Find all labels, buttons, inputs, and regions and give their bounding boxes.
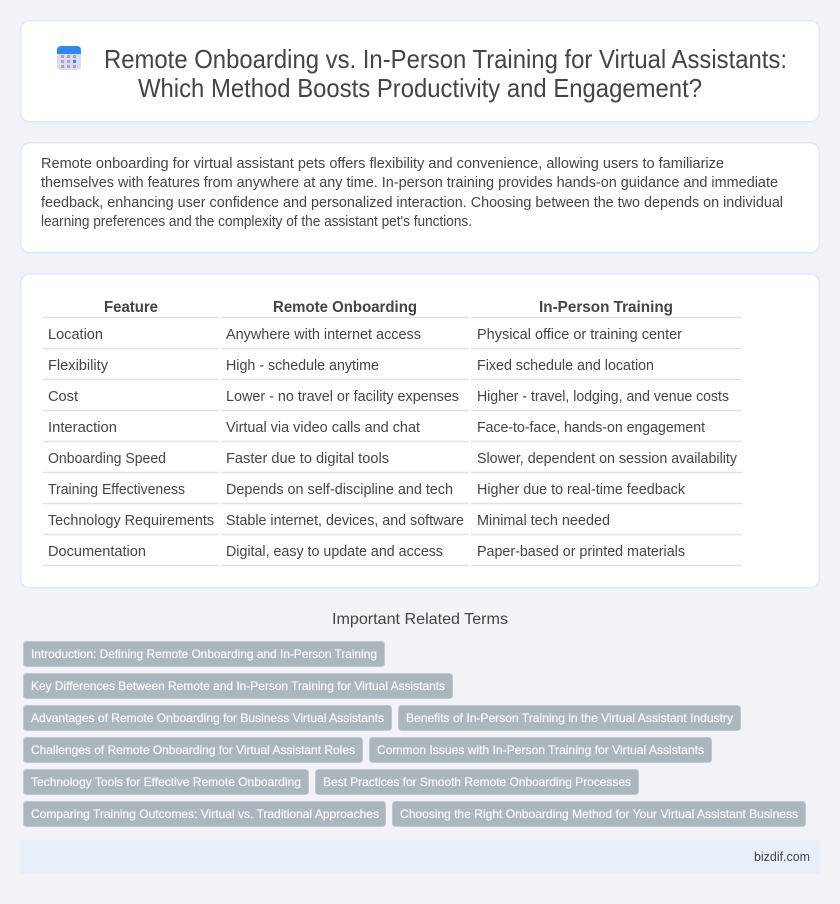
row: location — [48, 327, 682, 343]
footer — [20, 840, 820, 874]
tag — [24, 674, 452, 698]
row: interaction: Face-to-face, hands-on engagement — [477, 420, 705, 436]
tag — [24, 706, 392, 730]
row: documentation: Digital, easy to update and access — [226, 544, 443, 560]
row: onboarding speed: Faster due to digital tools — [226, 451, 389, 467]
row: cost: Cost — [48, 389, 78, 405]
row: flexibility: Flexibility — [48, 358, 109, 374]
intro paragraph: Remote onboarding for virtual assistant pets offers flexibility and convenience, allowing users to familiarize — [41, 156, 724, 172]
row: documentation: Paper-based or printed materials — [477, 544, 685, 560]
row: interaction: Virtual via video calls and chat — [226, 420, 420, 436]
related terms tags — [24, 642, 806, 826]
tag — [24, 642, 384, 666]
comparison table panel — [21, 274, 819, 588]
tag — [392, 802, 806, 826]
row: training effectiveness: Higher due to real-time feedback — [477, 482, 686, 498]
intro paragraph: themselves with features from anywhere at any time. In-person training provides hands-on guidance and immediate — [41, 175, 778, 191]
row: technology requirements: Technology Requirements — [48, 513, 214, 529]
row: interaction — [48, 420, 705, 436]
tag: Technology Tools for Effective Remote Onboarding — [31, 775, 301, 789]
icon: calendar — [57, 46, 81, 70]
table header: In-Person Training — [539, 299, 673, 316]
row: onboarding speed — [48, 451, 738, 467]
related terms heading: Important Related Terms — [332, 611, 508, 628]
tag: Choosing the Right Onboarding Method for Your Virtual Assistant Business — [400, 807, 798, 821]
tag: Comparing Training Outcomes: Virtual vs. Traditional Approaches — [31, 807, 379, 821]
title — [104, 46, 787, 103]
intro paragraph: feedback, enhancing user confidence and personalized interaction. Choosing between the two depends on individual — [41, 195, 783, 211]
row: flexibility: Fixed schedule and location — [477, 358, 654, 374]
row: training effectiveness: Training Effectiveness — [48, 482, 185, 498]
tag: Advantages of Remote Onboarding for Business Virtual Assistants — [31, 711, 384, 725]
table grid lines — [43, 318, 742, 566]
row: interaction: Interaction — [48, 420, 117, 436]
row: technology requirements: Minimal tech needed — [477, 513, 610, 529]
tag: Best Practices for Smooth Remote Onboarding Processes — [323, 775, 631, 789]
intro paragraph — [41, 156, 783, 230]
row: flexibility: High - schedule anytime — [226, 358, 379, 374]
row: technology requirements: Stable internet, devices, and software — [226, 513, 464, 529]
intro text panel — [21, 143, 819, 253]
row: flexibility — [48, 358, 654, 374]
title: Which Method Boosts Productivity and Engagement? — [138, 75, 702, 103]
row: location: Location — [48, 327, 103, 343]
tag — [316, 770, 638, 794]
row: location: Anywhere with internet access — [226, 327, 421, 343]
row: documentation — [48, 544, 685, 560]
table header: Remote Onboarding — [273, 299, 417, 316]
tag: Key Differences Between Remote and In-Person Training for Virtual Assistants — [31, 679, 445, 693]
tag: Challenges of Remote Onboarding for Virtual Assistant Roles — [31, 743, 355, 757]
row: onboarding speed: Slower, dependent on session availability — [477, 451, 738, 467]
title: Remote Onboarding vs. In-Person Training for Virtual Assistants: — [104, 46, 787, 74]
row: training effectiveness: Depends on self-discipline and tech — [226, 482, 453, 498]
row: location: Physical office or training center — [477, 327, 682, 343]
row: cost: Higher - travel, lodging, and venue costs — [477, 389, 729, 405]
tag: Common Issues with In-Person Training for Virtual Assistants — [377, 743, 704, 757]
tag — [24, 770, 308, 794]
row: cost: Lower - no travel or facility expenses — [226, 389, 459, 405]
tag: Benefits of In-Person Training in the Virtual Assistant Industry — [406, 711, 733, 725]
table header — [104, 299, 673, 316]
footer source: bizdif.com — [754, 849, 810, 864]
tag — [370, 738, 712, 762]
row: technology requirements — [48, 513, 610, 529]
tag — [24, 738, 362, 762]
row: onboarding speed: Onboarding Speed — [48, 451, 166, 467]
row: training effectiveness — [48, 482, 686, 498]
header panel — [21, 21, 819, 122]
tag — [398, 706, 740, 730]
tag: Introduction: Defining Remote Onboarding and In-Person Training — [31, 647, 377, 661]
tag — [24, 802, 386, 826]
intro paragraph: learning preferences and the complexity of the assistant pet's functions. — [41, 214, 472, 230]
row: cost — [48, 389, 729, 405]
row: documentation: Documentation — [48, 544, 146, 560]
table header: Feature — [104, 299, 158, 316]
